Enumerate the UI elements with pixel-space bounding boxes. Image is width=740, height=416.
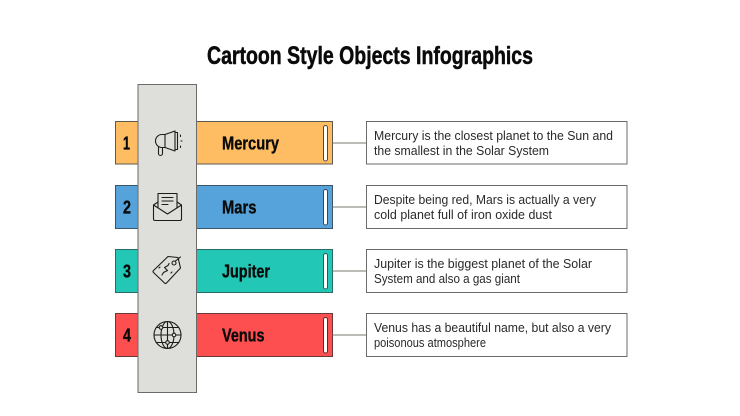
number 3: 3: [123, 262, 131, 282]
title: Cartoon Style Objects Infographics: [207, 42, 533, 70]
text box: Venus: [366, 314, 627, 356]
text box: Mars: [366, 186, 627, 228]
number 1: 1: [123, 134, 130, 154]
vertical grey panel: [138, 84, 196, 392]
text box: Venus: poisonous atmosphere: [374, 336, 486, 350]
row 3: Jupiter bar: [116, 250, 332, 292]
connector 3: [332, 270, 366, 272]
text box: Mars: Despite being red, Mars is actually a very: [374, 193, 597, 207]
text box: Mercury: the smallest in the Solar System: [374, 144, 549, 158]
text box: Jupiter: Jupiter is the biggest planet of the Solar: [374, 257, 592, 271]
connector 4: [332, 334, 366, 336]
text box: Venus: Venus has a beautiful name, but also a very: [374, 321, 612, 335]
label: Mars: Mars: [222, 198, 256, 218]
number 2: 2: [123, 198, 131, 218]
connector 2: [332, 206, 366, 208]
row 2: Mars bar: [116, 186, 332, 228]
icon: megaphone: [156, 131, 182, 156]
icon: price tag: [153, 256, 180, 284]
text box: Mercury: [366, 122, 627, 164]
label: Venus: Venus: [222, 326, 264, 346]
icon: envelope: [154, 194, 182, 220]
text box: Jupiter: System and also a gas giant: [374, 272, 520, 286]
row 4: Venus bar: [116, 314, 332, 356]
connector 1: [332, 142, 366, 144]
bar slot: [324, 254, 328, 289]
text box: Mercury: Mercury is the closest planet to the Sun and: [374, 129, 613, 143]
label: Mercury: Mercury: [222, 134, 279, 154]
label: Jupiter: Jupiter: [222, 262, 270, 282]
bar slot: [324, 126, 328, 161]
text box: Jupiter: [366, 250, 627, 292]
icon: globe: [154, 322, 181, 348]
number 4: 4: [123, 326, 131, 346]
bar slot: [324, 190, 328, 225]
row 1: Mercury bar: [116, 122, 332, 164]
bar slot: [324, 318, 328, 353]
text box: Mars: cold planet full of iron oxide dust: [374, 208, 553, 222]
